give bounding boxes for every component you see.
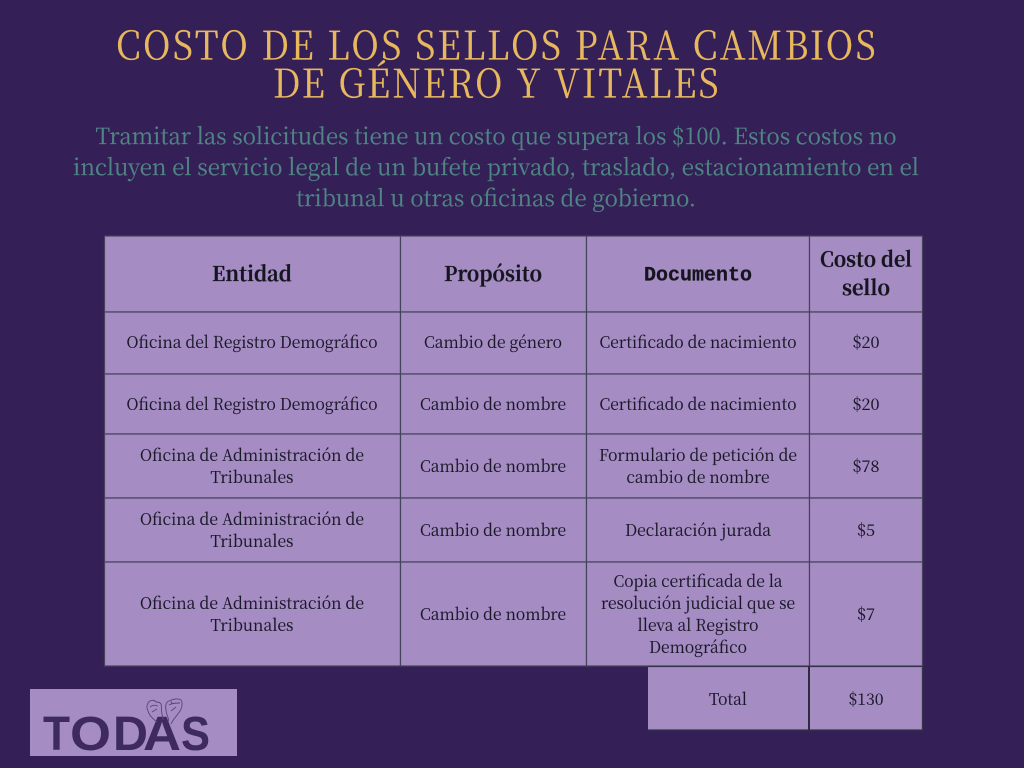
table row 4: Declaración jurada <box>625 517 772 541</box>
table row 4: Cambio de nombre <box>420 517 566 541</box>
cost table <box>104 236 922 666</box>
logo: TODAS: S <box>181 708 210 761</box>
icon: raised fists <box>147 699 182 724</box>
subtitle text block: incluyen el servicio legal de un bufete privado, traslado, estacionamiento en el <box>73 150 919 182</box>
table row 2: Cambio de nombre <box>420 391 566 415</box>
table row 5: lleva al Registro <box>638 612 759 636</box>
logo: TODAS: O <box>70 708 111 761</box>
table row 3: Formulario de petición de <box>599 442 797 466</box>
table row 4 <box>104 498 922 562</box>
title <box>116 16 878 110</box>
table header row <box>104 236 922 312</box>
table row 3: Tribunales <box>210 464 294 488</box>
total row: $130 <box>848 686 884 710</box>
table row 5: Cambio de nombre <box>420 601 566 625</box>
table row 2: Oficina del Registro Demográfico <box>126 391 378 415</box>
table row 5 <box>104 562 922 666</box>
table row 5: resolución judicial que se <box>601 590 795 614</box>
logo: TODAS: T <box>43 708 70 761</box>
table row 3: $78 <box>852 453 880 477</box>
total row: Total <box>709 686 747 710</box>
table row 2: $20 <box>852 391 880 415</box>
table row 1: $20 <box>852 329 880 353</box>
table header row: Entidad <box>212 257 292 287</box>
table row 2: Certificado de nacimiento <box>600 391 797 415</box>
table header row: Documento <box>644 264 752 288</box>
table row 5: Oficina de Administración de <box>140 590 364 614</box>
title: COSTO DE LOS SELLOS PARA CAMBIOS <box>116 16 878 72</box>
title: DE GÉNERO Y VITALES <box>273 54 721 110</box>
table row 3: Cambio de nombre <box>420 453 566 477</box>
table row 5: Tribunales <box>210 612 294 636</box>
logo: TODAS <box>30 689 237 761</box>
table row 5: $7 <box>857 601 875 625</box>
table row 1 <box>104 312 922 374</box>
table header row: sello <box>842 271 890 301</box>
table row 3 <box>104 434 922 498</box>
subtitle text block: Tramitar las solicitudes tiene un costo que supera los $100. Estos costos no <box>96 119 896 151</box>
logo: TODAS: D <box>113 708 148 761</box>
table row 3: cambio de nombre <box>626 464 770 488</box>
table row 4: Tribunales <box>210 528 294 552</box>
table row 1: Certificado de nacimiento <box>600 329 797 353</box>
table header row: Costo del <box>820 242 912 272</box>
table row 5: Demográfico <box>649 634 747 658</box>
table row 4: $5 <box>857 517 875 541</box>
table row 1: Oficina del Registro Demográfico <box>126 329 378 353</box>
logo: TODAS: A <box>143 708 181 761</box>
table row 5: Copia certificada de la <box>614 568 783 592</box>
table row 1: Cambio de género <box>424 329 562 353</box>
table row 4: Oficina de Administración de <box>140 506 364 530</box>
total row <box>648 666 923 730</box>
table row 3: Oficina de Administración de <box>140 442 364 466</box>
table header row: Propósito <box>444 257 542 287</box>
subtitle text block: tribunal u otras oficinas de gobierno. <box>296 181 696 213</box>
table row 2 <box>104 374 922 434</box>
subtitle text block <box>73 119 919 213</box>
